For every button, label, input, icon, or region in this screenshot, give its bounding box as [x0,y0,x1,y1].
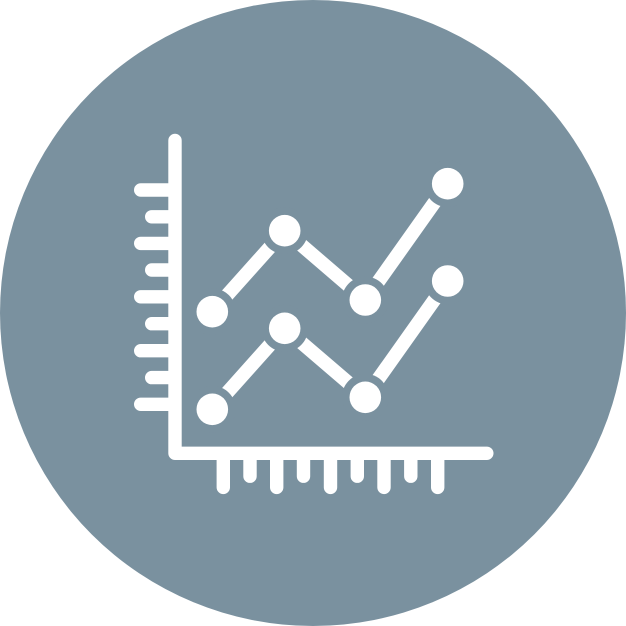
upper series point gaps [189,160,471,335]
y and x axis [175,140,487,453]
lower data series [189,258,471,433]
y axis tick marks [141,190,170,404]
lower series point gaps [189,258,471,433]
icon: chart axes with ticks [141,140,487,487]
lower series points [196,265,464,425]
upper series points [196,168,464,328]
upper data series [189,160,471,335]
lower series line segments [212,281,448,409]
upper series line segments [212,184,448,312]
x axis tick marks [223,458,438,487]
